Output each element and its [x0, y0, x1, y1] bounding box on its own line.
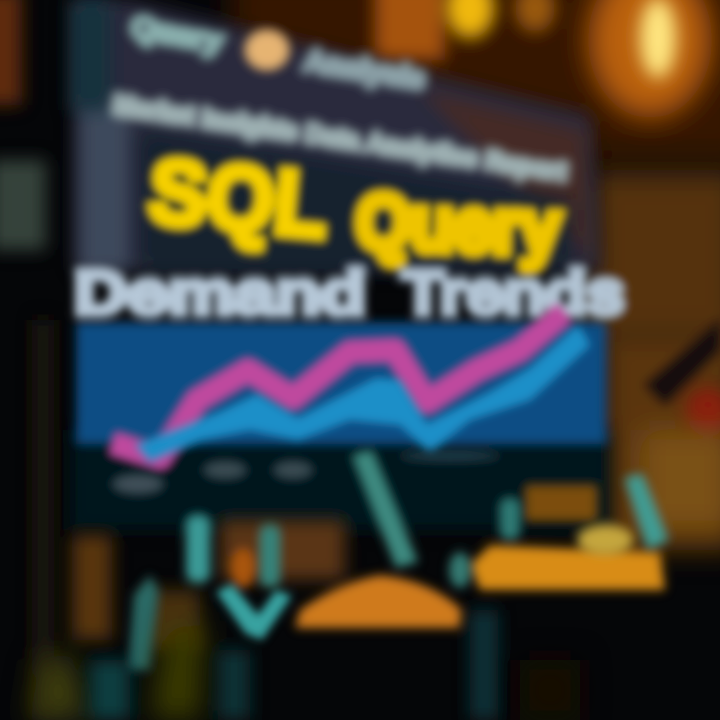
foreground figures and desks: [30, 450, 668, 720]
top text lines: [111, 10, 569, 187]
heading: Demand Trends: [74, 259, 624, 328]
blue series area: [135, 325, 590, 462]
heading: Demand Trends: Trends: [402, 259, 624, 328]
area chart: [112, 312, 590, 462]
pink series line: [112, 312, 565, 458]
top text lines: Analysis: [302, 44, 428, 96]
top text lines: Query: [129, 10, 225, 59]
heading: SQL Query: Query: [354, 177, 561, 272]
heading: SQL Query: [145, 140, 561, 272]
panel: billboard: [70, 0, 610, 530]
chart background: [76, 322, 606, 444]
axis labels: [112, 451, 500, 494]
top text lines: Market Insights Data Analytics Report: [111, 89, 569, 187]
heading: Demand Trends: Demand: [74, 259, 366, 328]
heading: SQL Query: SQL: [145, 140, 331, 257]
